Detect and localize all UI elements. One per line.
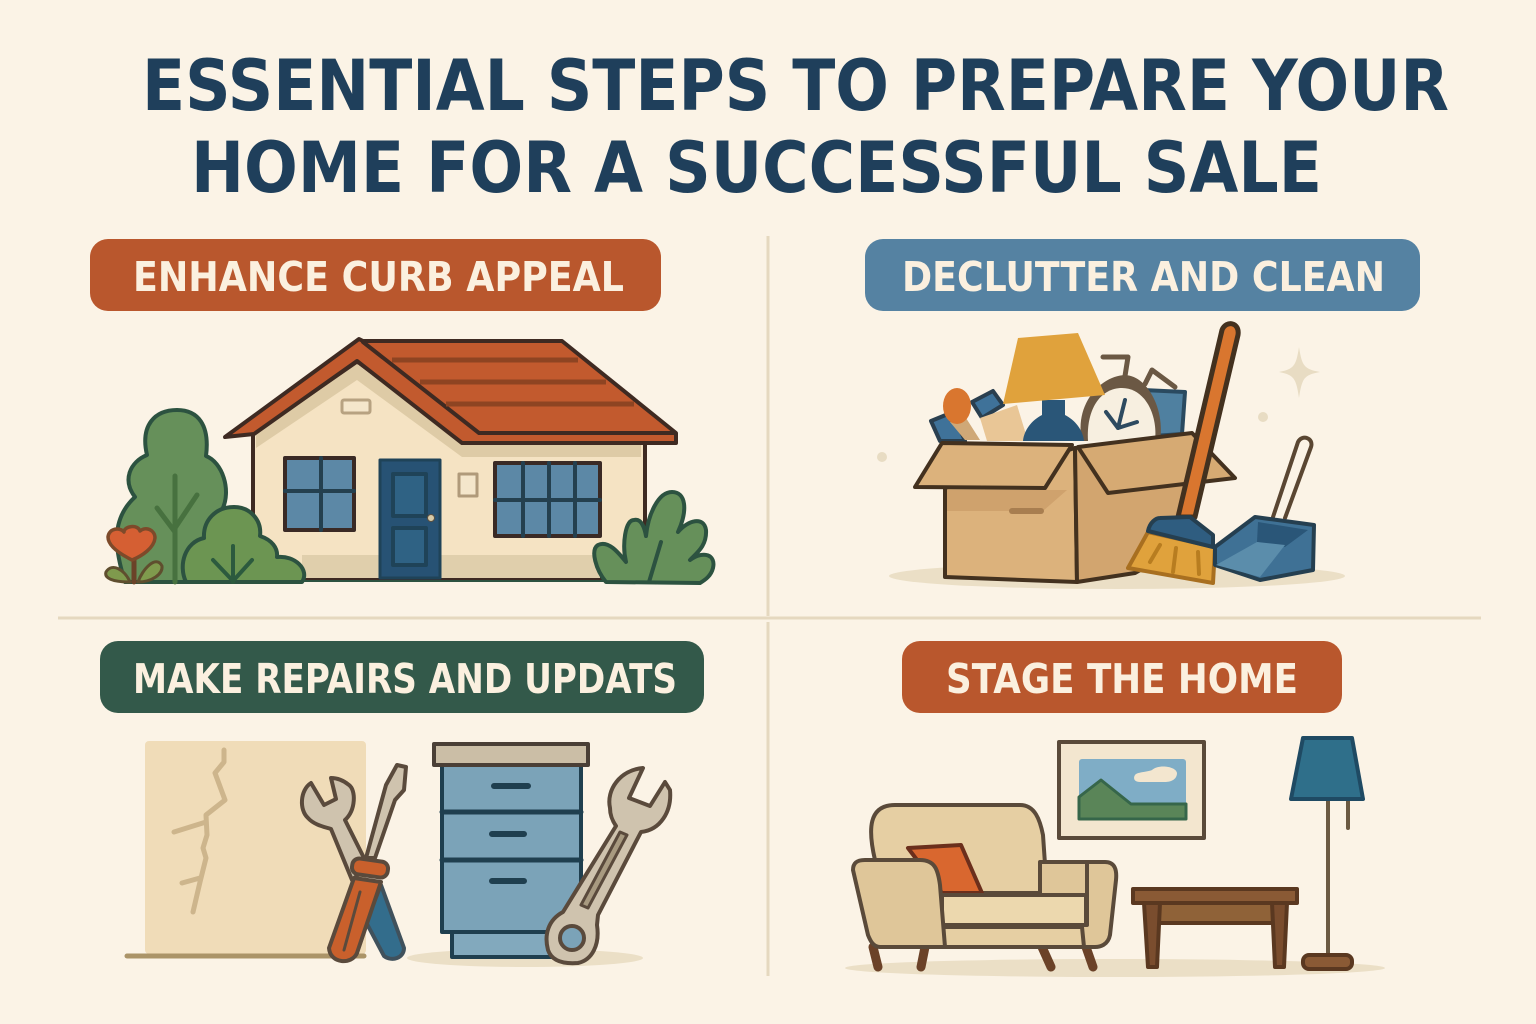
heading: declutter and clean: DECLUTTER AND CLEAN: [902, 253, 1385, 301]
panel: declutter and clean: [865, 239, 1420, 589]
icon: cracked wall and tools: [127, 741, 670, 967]
heading: enhance curb appeal: [90, 239, 661, 311]
panel: enhance curb appeal: [90, 239, 713, 583]
icon: house with trees: [106, 339, 713, 583]
heading: declutter and clean: [865, 239, 1420, 311]
heading: make repairs and updats: [100, 641, 704, 713]
icon: armchair, table, picture and lamp: [845, 738, 1385, 977]
icon: box, broom and dustpan: [877, 324, 1345, 589]
title: [142, 45, 1449, 209]
heading: enhance curb appeal: ENHANCE CURB APPEAL: [133, 253, 624, 301]
heading: make repairs and updats: MAKE REPAIRS AND UPDATS: [133, 655, 677, 703]
title: HOME FOR A SUCCESSFUL SALE: [191, 127, 1322, 209]
heading: stage the home: [902, 641, 1342, 713]
panel: stage the home: [845, 641, 1385, 977]
heading: stage the home: STAGE THE HOME: [946, 655, 1298, 703]
panel: make repairs and updates: [100, 641, 704, 967]
